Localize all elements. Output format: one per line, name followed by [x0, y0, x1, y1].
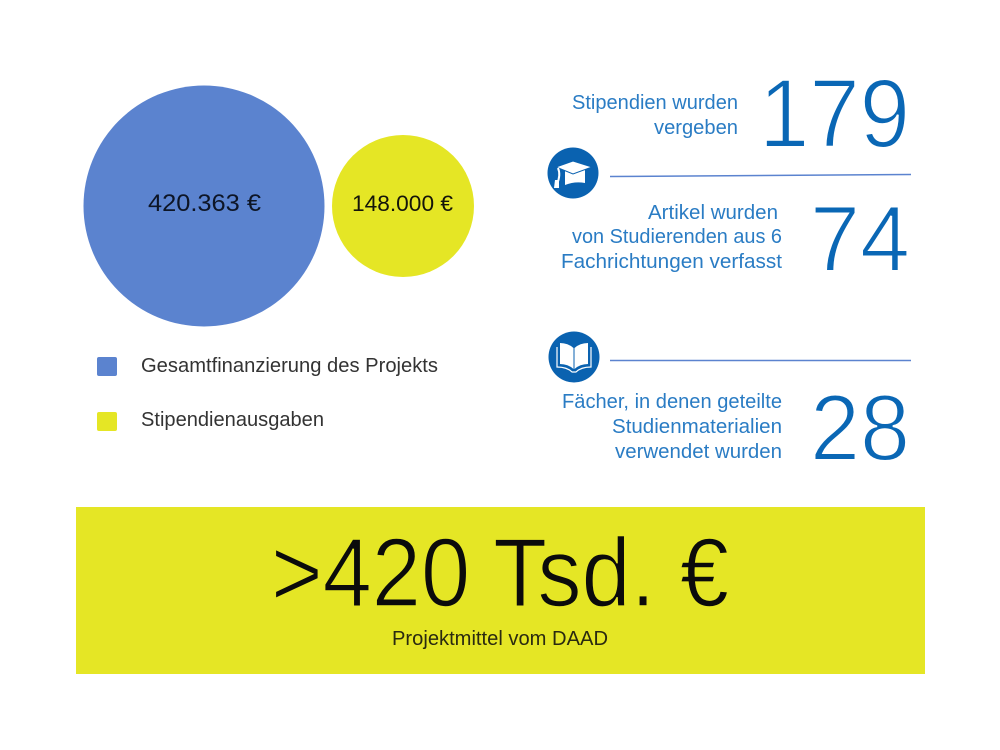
icon: graduation cap: [548, 148, 598, 198]
stat: 179 scholarships: Stipendien wurden: [572, 92, 738, 114]
circle: total funding: [84, 86, 324, 326]
stat: 74 articles: [561, 186, 910, 291]
banner caption: Projektmittel vom DAAD: [392, 628, 608, 650]
panel: funding comparison: [84, 86, 474, 431]
stat: 179 scholarships: [572, 59, 910, 168]
circle: scholarship spending: [332, 135, 474, 277]
stat: 28 subjects: verwendet wurden: [615, 441, 782, 463]
stat: 28 subjects: Studienmaterialien: [612, 416, 782, 438]
stat: 28 subjects: 28: [810, 375, 910, 480]
stat: 28 subjects: Fächer, in denen geteilte: [562, 391, 782, 413]
banner headline: >420 Tsd. €: [271, 518, 729, 627]
legend: scholarship spending: Stipendienausgaben: [141, 409, 324, 431]
banner: project funds: [76, 507, 925, 674]
circle: total funding: 420.363 €: [148, 190, 262, 217]
divider line: [610, 360, 911, 362]
stat: 74 articles: 74: [810, 186, 910, 291]
stat: 28 subjects: [562, 375, 910, 480]
stat: 74 articles: Artikel wurden: [648, 202, 778, 224]
stat: 179 scholarships: 179: [759, 59, 910, 168]
circle: scholarship spending: 148.000 €: [352, 191, 453, 216]
divider line: [610, 174, 911, 176]
stat: 179 scholarships: vergeben: [654, 117, 738, 139]
legend: total funding: Gesamtfinanzierung des Projekts: [141, 355, 438, 377]
icon: open book: [548, 332, 600, 382]
stat: 74 articles: Fachrichtungen verfasst: [561, 251, 782, 273]
stat: 74 articles: von Studierenden aus 6: [572, 226, 782, 248]
